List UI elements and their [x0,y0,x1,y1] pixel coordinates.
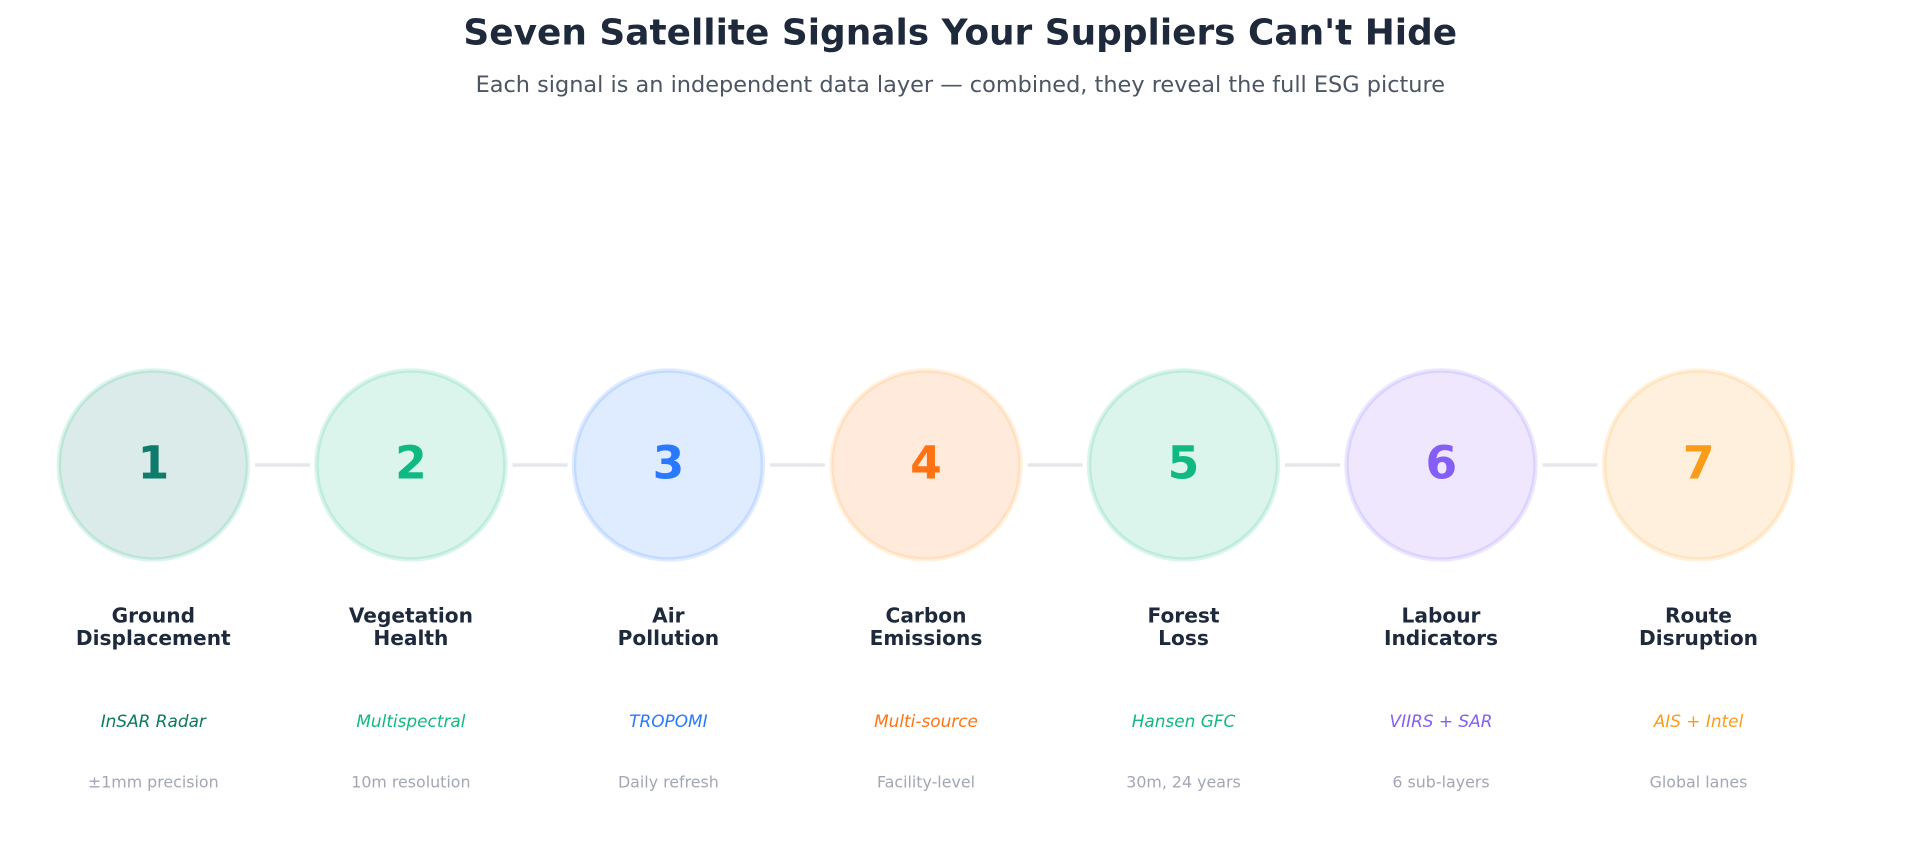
circle 6 [1346,370,1536,560]
name 5: Loss [1158,626,1209,650]
circle 5 [1089,370,1278,560]
detail 5: 30m, 24 years [1126,773,1241,792]
name 4: Carbon [886,604,966,628]
source 5: Hansen GFC [1132,711,1236,731]
signal 3: air pollution [574,370,763,792]
detail 3: Daily refresh [618,773,719,792]
signal 6: labour indicators [1346,370,1536,792]
number 7: 7 [1683,436,1715,490]
signal 2: vegetation health [316,370,505,792]
name 4: Emissions [870,626,982,650]
signal 4: carbon emissions [832,370,1020,792]
detail 1: ±1mm precision [88,773,219,792]
name 2: Vegetation [349,604,473,628]
number 4: 4 [910,436,942,490]
signal 7: route disruption [1604,370,1793,792]
number 2: 2 [395,436,427,490]
detail 2: 10m resolution [351,773,471,792]
name 1: Displacement [76,626,231,650]
source 7: AIS + Intel [1653,711,1744,731]
name 1: Ground [112,604,195,628]
circle 3 [574,370,763,560]
name 6: Labour [1402,604,1481,628]
name 3: Pollution [618,626,719,650]
detail 4: Facility-level [877,773,975,792]
number 3: 3 [653,436,684,490]
circle 4 [832,370,1020,560]
circle 7 [1604,370,1793,560]
signal 5: forest loss [1089,370,1278,792]
circle 1 [59,370,248,560]
name 7: Route [1665,604,1732,628]
number 6: 6 [1425,436,1457,490]
signal 1: ground displacement [59,370,248,792]
source 2: Multispectral [356,711,466,731]
name 7: Disruption [1639,626,1758,650]
title: Seven Satellite Signals Your Suppliers Can't Hide [463,12,1457,53]
source 6: VIIRS + SAR [1390,711,1492,731]
number 1: 1 [138,436,169,490]
name 6: Indicators [1384,626,1498,650]
source 4: Multi-source [874,711,978,731]
source 3: TROPOMI [629,711,708,731]
detail 7: Global lanes [1650,773,1747,792]
name 5: Forest [1148,604,1220,628]
name 2: Health [373,626,448,650]
source 1: InSAR Radar [101,711,207,731]
subtitle: Each signal is an independent data layer — combined, they reveal the full ESG picture [476,72,1445,98]
number 5: 5 [1168,436,1199,490]
detail 6: 6 sub-layers [1392,773,1490,792]
name 3: Air [652,604,685,628]
circle 2 [316,370,505,560]
